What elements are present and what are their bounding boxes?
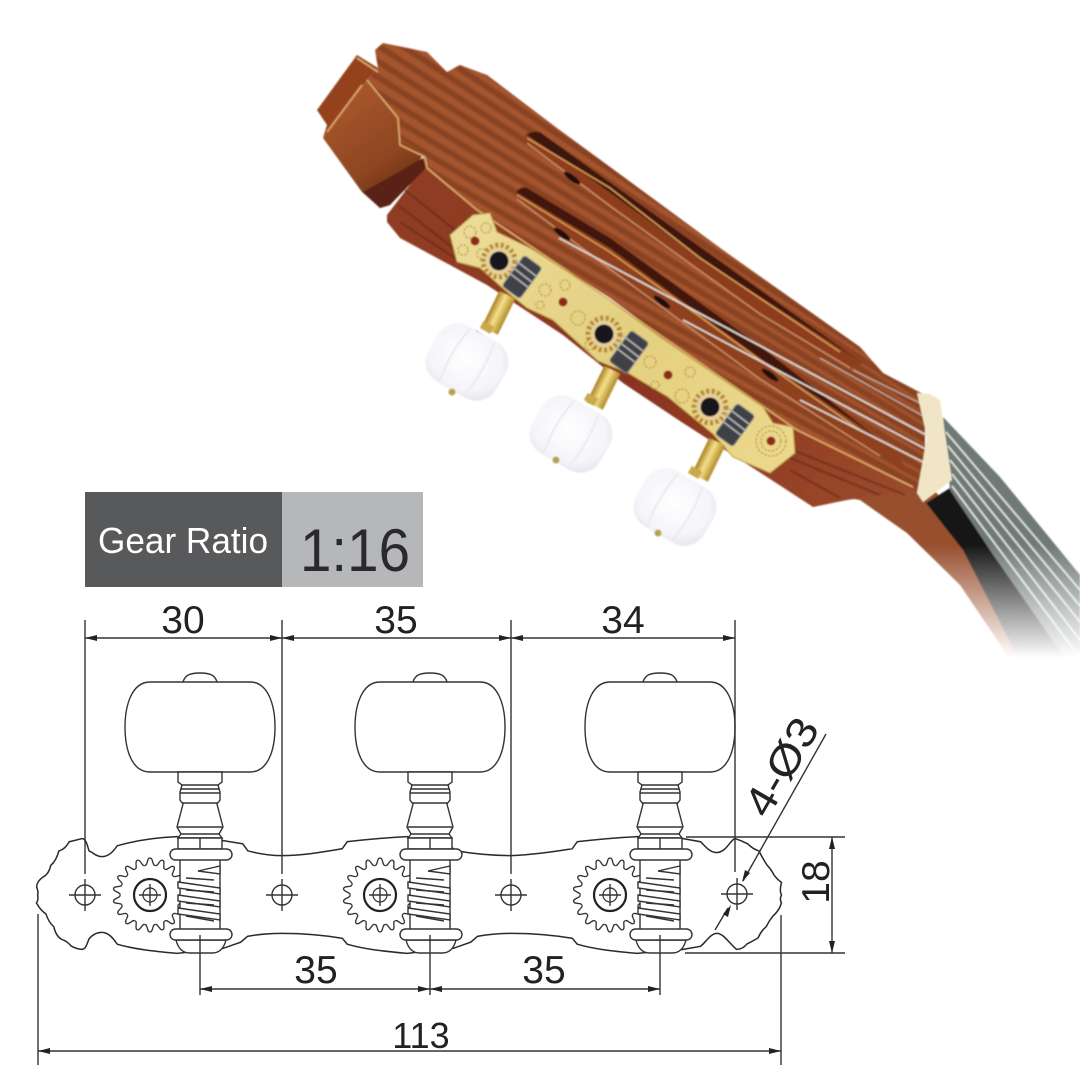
dark end block corner bbox=[363, 158, 427, 208]
dimension: plate height bbox=[685, 837, 845, 953]
dimension: hole diameter: 4-Ø3 bbox=[735, 709, 828, 824]
mounting hole markers bbox=[69, 878, 753, 911]
lower end block bbox=[323, 80, 423, 208]
badge label: Gear Ratio bbox=[98, 520, 268, 561]
dimension: hole diameter bbox=[715, 709, 828, 930]
neck wood bbox=[847, 480, 1075, 662]
post black rings bbox=[475, 332, 702, 494]
dimension: overall length: 113 bbox=[392, 1015, 450, 1056]
badge value bbox=[282, 492, 423, 587]
lower slot bbox=[515, 187, 905, 470]
tuning posts bbox=[482, 291, 725, 482]
badge label bbox=[85, 492, 282, 587]
gears bbox=[483, 245, 726, 423]
stem bbox=[177, 772, 223, 838]
face grain stripes bbox=[371, 44, 926, 488]
dimension: post spacing bbox=[200, 935, 660, 995]
nuts and collars bbox=[178, 838, 222, 849]
upper end block bbox=[317, 55, 378, 138]
screws bbox=[490, 252, 720, 416]
tuner unit left bbox=[113, 673, 275, 953]
knob bbox=[183, 673, 217, 682]
fretboard strings bbox=[946, 432, 1080, 658]
fretboard bbox=[943, 417, 1080, 662]
side dark grain bbox=[398, 190, 905, 498]
worm bbox=[180, 858, 220, 930]
dimension: post spacing: 35 bbox=[294, 949, 338, 992]
neck fade bbox=[830, 545, 1080, 665]
nut bbox=[917, 393, 952, 502]
plate engraving bbox=[458, 223, 786, 456]
technical drawing bbox=[38, 599, 845, 1065]
face edge lines bbox=[327, 58, 913, 487]
tuner plate bbox=[450, 213, 795, 473]
tuner unit middle bbox=[343, 673, 505, 953]
dimension: post spacing: 35 bbox=[522, 949, 566, 992]
headstock face bbox=[367, 43, 925, 492]
dimension: plate height: 18 bbox=[795, 860, 838, 904]
mounting holes bbox=[470, 236, 776, 446]
dimension: overall length bbox=[38, 914, 781, 1065]
slot shadows bbox=[552, 170, 780, 383]
gear bbox=[113, 858, 187, 932]
black binding bbox=[926, 488, 1068, 662]
dimension: top spacing: 30 bbox=[161, 599, 205, 642]
headstock photo bbox=[317, 0, 1080, 665]
upper slot bbox=[525, 131, 863, 368]
tuner plate outline bbox=[38, 838, 780, 952]
tuner unit right bbox=[573, 673, 735, 953]
knobs bbox=[417, 304, 523, 409]
dimension: top spacing bbox=[85, 599, 735, 874]
badge value: 1:16 bbox=[300, 517, 410, 584]
dimension: top spacing: 35 bbox=[374, 599, 418, 642]
worm gears bbox=[502, 255, 755, 447]
headstock side bbox=[387, 165, 917, 507]
strings bbox=[559, 238, 935, 468]
gear ratio badge bbox=[85, 492, 423, 587]
knob tips bbox=[448, 388, 662, 536]
dimension: top spacing: 34 bbox=[601, 599, 645, 642]
